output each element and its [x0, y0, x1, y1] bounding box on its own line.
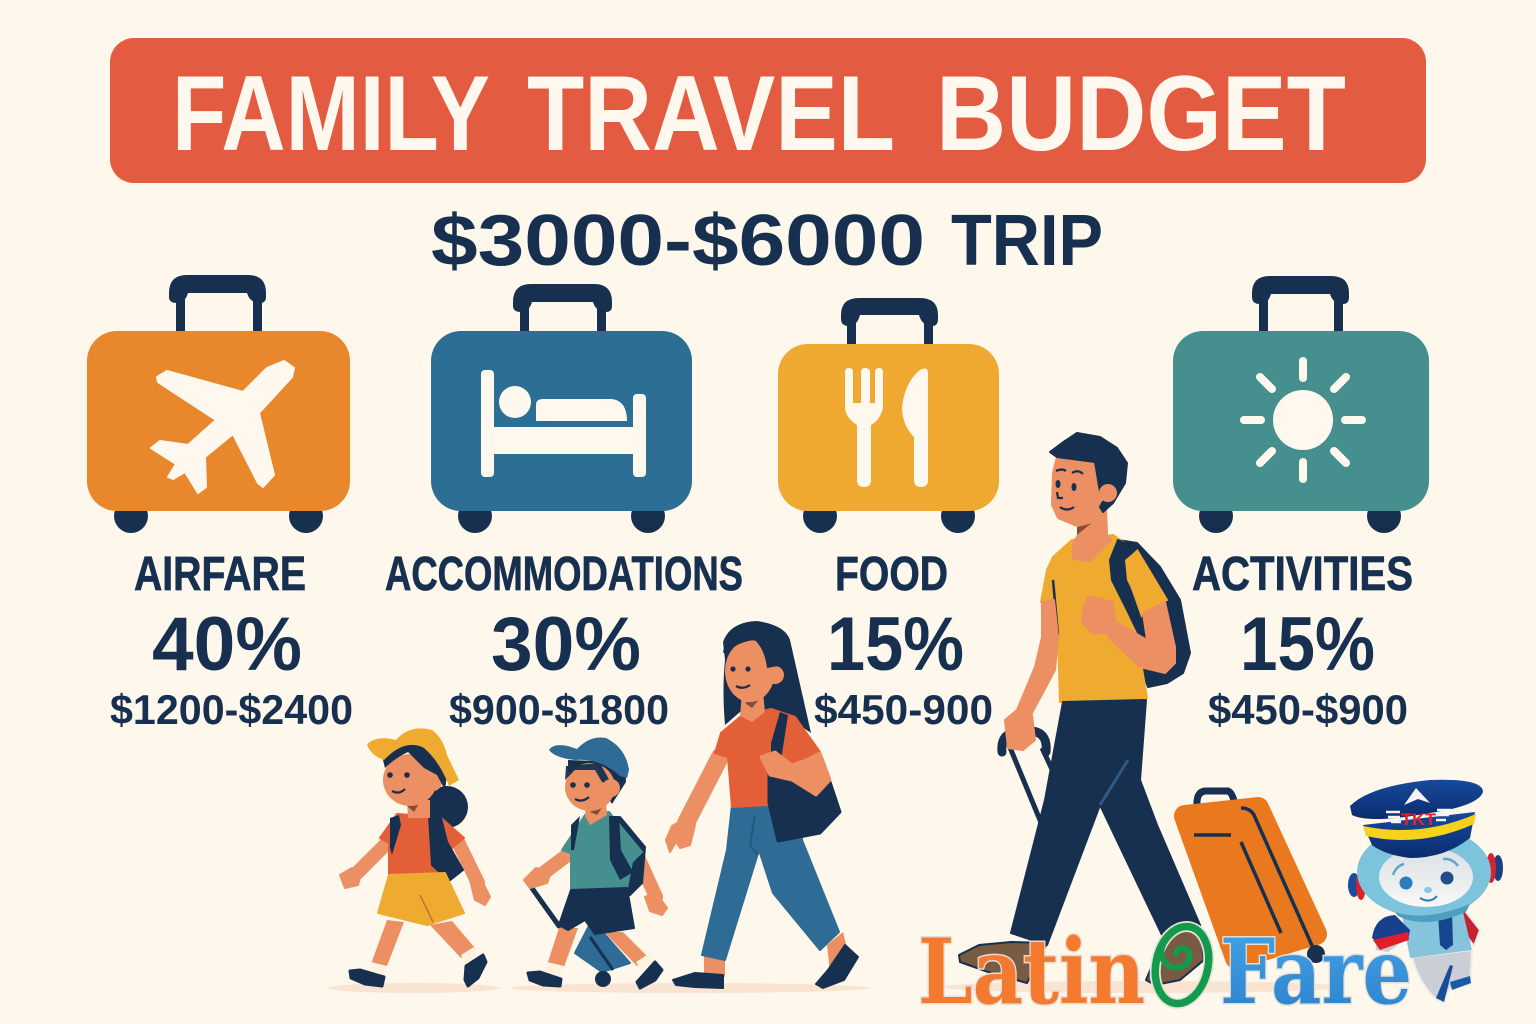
subtitle [431, 201, 1103, 281]
percent: activities: 15% [1240, 602, 1375, 687]
title banner: TRAVEL [527, 53, 895, 173]
panel: accommodations [385, 284, 743, 733]
ground shadows [328, 981, 1344, 993]
subtitle: TRIP [951, 201, 1103, 281]
subtitle: $3000-$6000 [431, 201, 925, 281]
icon: airfare suitcase [87, 275, 350, 533]
amount: activities: $450-$900 [1208, 686, 1408, 733]
icon: accommodations suitcase [431, 284, 692, 533]
percent: accommodations: 30% [491, 602, 641, 687]
figure: father [959, 433, 1204, 985]
label: accommodations: ACCOMMODATIONS [385, 548, 743, 601]
percent: food: 15% [827, 602, 964, 687]
amount: airfare: $1200-$2400 [110, 686, 353, 733]
panel: activities [1173, 276, 1429, 733]
label: airfare: AIRFARE [134, 548, 306, 601]
panel: airfare [87, 275, 353, 733]
label: activities: ACTIVITIES [1192, 548, 1413, 601]
title banner [110, 38, 1426, 183]
logo: LatinOFare: Latin [918, 919, 1145, 1024]
title banner: FAMILY [172, 53, 490, 173]
figure: girl [340, 728, 490, 986]
panel: food [778, 298, 999, 733]
percent: airfare: 40% [152, 602, 302, 687]
mascot: pilot character [1348, 780, 1503, 1002]
logo: LatinOFare [918, 919, 1412, 1024]
amount: food: $450-900 [814, 686, 993, 733]
amount: accommodations: $900-$1800 [449, 686, 669, 733]
label: food: FOOD [835, 548, 948, 601]
mascot cap badge: TKT [1401, 810, 1437, 829]
logo: LatinOFare: Fare [1220, 919, 1412, 1024]
figure: mother [666, 621, 858, 988]
icon: food suitcase [778, 298, 999, 533]
icon: activities suitcase [1173, 276, 1429, 533]
orange suitcase [1185, 791, 1325, 963]
title banner: BUDGET [936, 53, 1346, 173]
figure: boy [524, 737, 667, 988]
